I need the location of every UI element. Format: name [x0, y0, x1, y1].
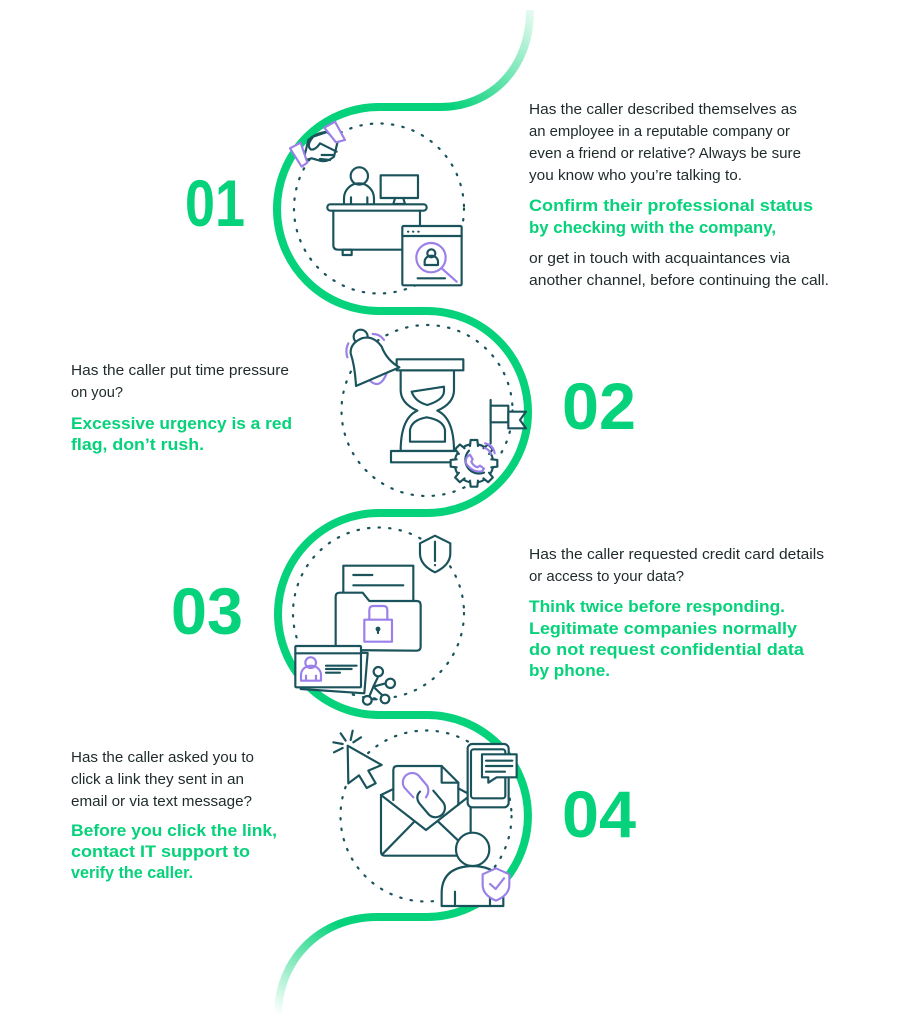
text block 3: by phone. — [529, 661, 610, 680]
text block 1: Has the caller described themselves as — [529, 101, 797, 118]
text block 4: verify the caller. — [71, 863, 193, 882]
dotted circle 1 — [294, 124, 464, 294]
text block 3: or access to your data? — [529, 568, 684, 585]
panel: step 2 — [71, 325, 636, 496]
text block 4: contact IT support to — [71, 842, 250, 861]
ribbon: bottom fading tail — [278, 917, 377, 1015]
ribbon: winding line — [277, 107, 528, 917]
text block 3: Has the caller requested credit card details — [529, 546, 824, 563]
text block 1 — [529, 101, 829, 289]
text block 3: Think twice before responding. — [529, 597, 785, 616]
text block 3 — [529, 546, 824, 680]
text block 2: on you? — [71, 384, 123, 401]
panel: step 1 — [185, 101, 829, 294]
icon: hourglass, bell, flag and gear — [346, 330, 526, 487]
panel: step 3 — [171, 528, 824, 705]
dotted circle 2 — [342, 325, 512, 496]
text block 1: you know who you’re talking to. — [529, 167, 742, 184]
text block 2: Excessive urgency is a red — [71, 414, 292, 433]
icon: cursor, envelope, phone and person — [333, 731, 517, 906]
text block 1: by checking with the company, — [529, 218, 776, 237]
text block 1: another channel, before continuing the call. — [529, 272, 829, 289]
text block 3: Legitimate companies normally — [529, 619, 798, 638]
ribbon: top fading tail — [430, 10, 530, 107]
text block 1: even a friend or relative? Always be sure — [529, 145, 801, 162]
text block 4: click a link they sent in an — [71, 771, 244, 788]
icon: folder, lock, shield, ID card and network — [295, 536, 450, 705]
text block 4: Before you click the link, — [71, 821, 277, 840]
dotted circle 4 — [340, 730, 512, 902]
text block 4: email or via text message? — [71, 793, 252, 810]
panel: step 4 — [71, 730, 636, 906]
number 03: 03 — [171, 574, 243, 648]
icon: desk, handshake and profile search — [290, 122, 462, 285]
text block 4 — [71, 749, 277, 882]
text block 3: do not request confidential data — [529, 640, 805, 659]
text block 2 — [71, 362, 292, 454]
text block 1: or get in touch with acquaintances via — [529, 250, 791, 267]
text block 2: flag, don’t rush. — [71, 435, 204, 454]
text block 4: Has the caller asked you to — [71, 749, 254, 766]
number 01: 01 — [185, 166, 245, 240]
dotted circle 3 — [293, 528, 464, 698]
number 02: 02 — [562, 369, 636, 443]
text block 1: an employee in a reputable company or — [529, 123, 790, 140]
number 04: 04 — [562, 777, 636, 851]
text block 2: Has the caller put time pressure — [71, 362, 289, 379]
text block 1: Confirm their professional status — [529, 196, 813, 215]
